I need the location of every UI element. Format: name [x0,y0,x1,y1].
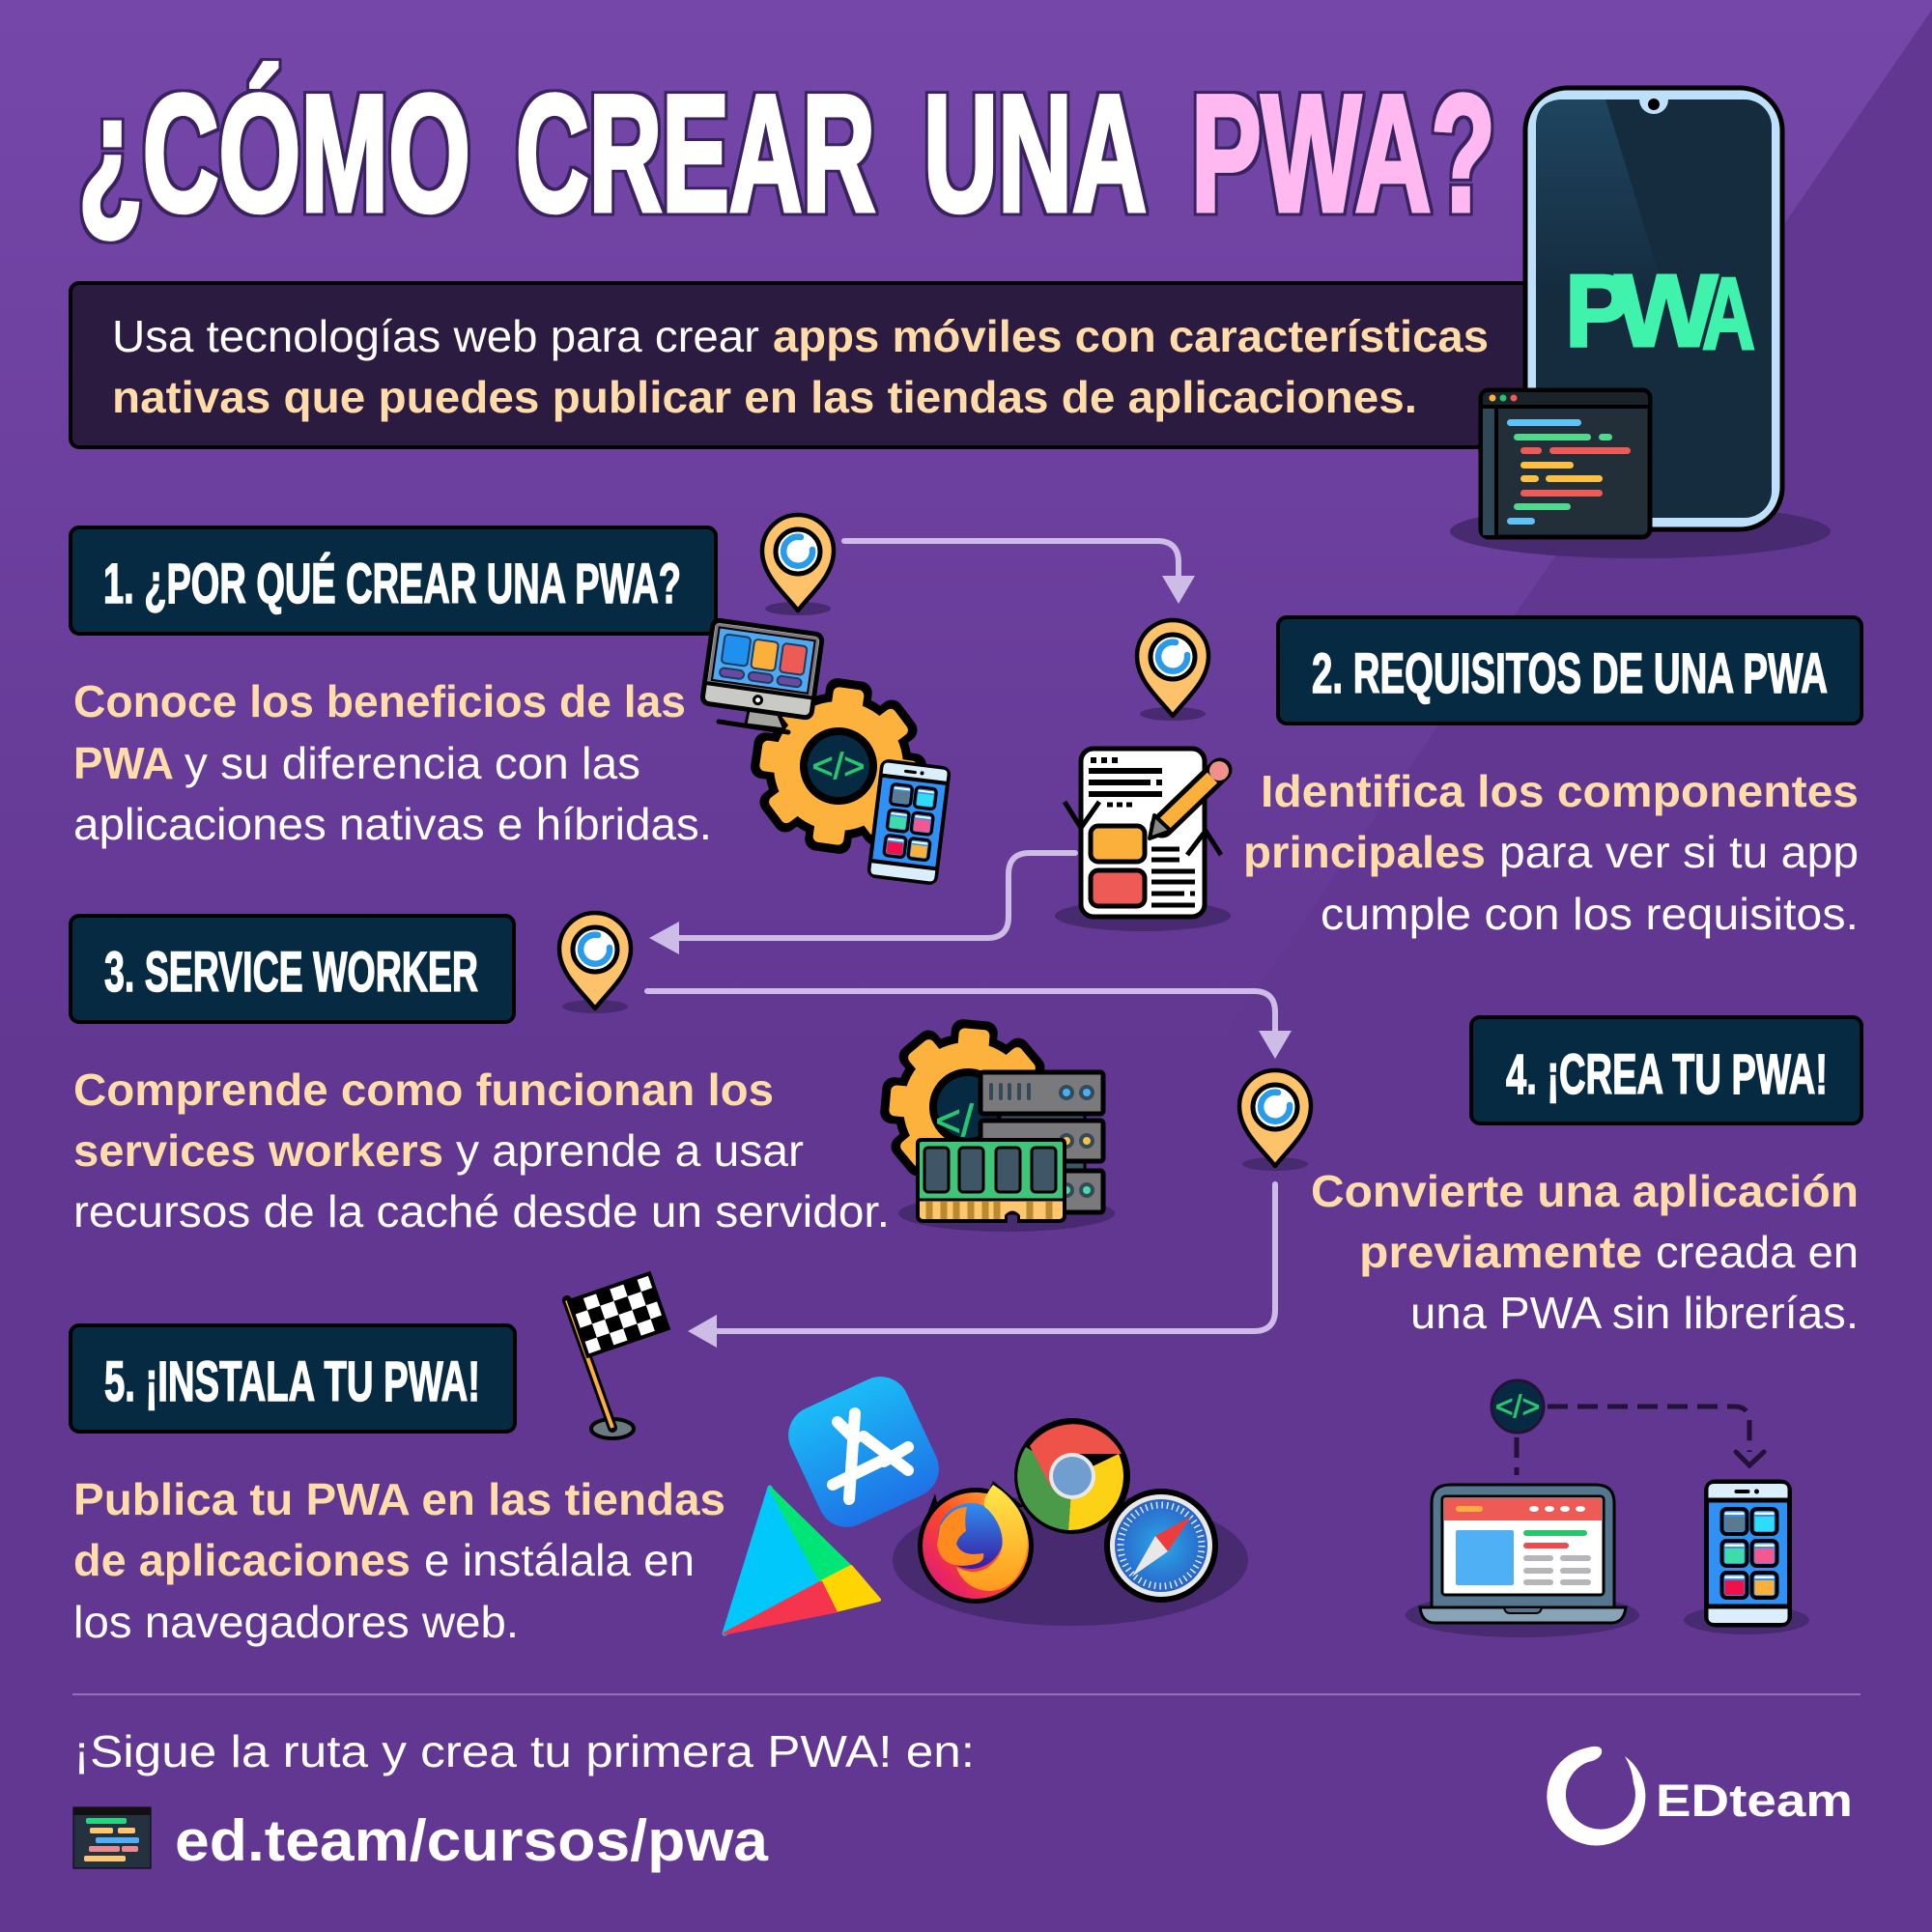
icon: safari [1104,1489,1218,1603]
icon: pin 2 [1137,620,1208,721]
text block: step 5: de aplicaciones [73,1535,411,1585]
logo: EDteam [1547,1747,1853,1845]
icon: checklist document with pencil [1055,749,1231,931]
heading: step 2 [1278,617,1861,724]
text block: step 4: Convierte una aplicación [1311,1166,1859,1216]
icon: gear, servers and memory [873,1012,1115,1232]
text block: step 4: una PWA sin librerías. [1410,1288,1859,1338]
panel: intro [71,283,1539,447]
icon: code to devices diagram: </> [1495,1389,1540,1424]
heading: step 3 [71,916,514,1022]
divider [72,1693,1861,1695]
icon: pin 4 [1239,1070,1311,1171]
icon: pin 3 [559,913,631,1013]
text block: step 3: Comprende como funcionan los [73,1065,774,1115]
arrow: step 4 to step 5 [688,1184,1275,1348]
text block: step 5: los navegadores web. [73,1597,519,1647]
text block: step 2: cumple con los requisitos. [1321,889,1859,939]
icon: firefox [918,1481,1034,1604]
text block: footer url: ed.team/cursos/pwa [175,1808,769,1873]
icon: phone shadow [1450,504,1831,558]
icon: google play [724,1488,879,1634]
icon: code window [1481,390,1650,537]
icon: gear with monitor and phone: </> [812,747,865,787]
icon: checkered flag [567,1273,668,1438]
icon: gear, servers and memory: </ [935,1095,974,1146]
text block: step 2: para ver si tu app [1499,827,1859,877]
icon: app store [779,1367,949,1537]
text block: step 1: y su diferencia con las [185,738,640,788]
heading: step 1 [71,527,716,634]
icon: laptop [1406,1485,1639,1637]
icon: phone with PWA logo: P [1565,254,1631,368]
text block: step 1: aplicaciones nativas e híbridas. [73,799,712,849]
arrow: step 2 to step 3 [649,853,1075,954]
text block: step 1: PWA [73,738,174,788]
title: CREAR [516,61,875,246]
icon: footer code window [73,1807,151,1868]
text block: step 1: Conoce los beneficios de las [73,676,686,726]
title: PWA? [1191,61,1495,246]
text block: step 3: y aprende a usar [456,1125,804,1176]
text block: step 2: principales [1243,827,1486,877]
text block: step 4: previamente [1359,1227,1642,1277]
title: ¿CÓMO [78,61,470,246]
heading: step 1: 1. ¿POR QUÉ CREAR UNA PWA? [103,553,681,615]
icon: browser shadow [893,1494,1248,1626]
icon: code to devices diagram [1492,1380,1764,1475]
heading: step 5 [71,1325,515,1432]
title [78,61,1495,246]
heading: step 4 [1471,1017,1861,1123]
text block: step 2 [1243,766,1859,939]
text block: step 4 [1311,1166,1859,1338]
icon: phone with PWA logo [1525,88,1782,529]
text block: step 2: Identifica los componentes [1261,766,1859,816]
logo: EDteam: EDteam [1656,1775,1853,1826]
text block: step 5: e instálala en [424,1535,695,1585]
icon: phone with PWA logo: A [1702,257,1755,371]
heading: step 5: 5. ¡INSTALA TU PWA! [104,1350,480,1413]
text block: step 5 [73,1474,725,1647]
panel: intro: apps móviles con características [773,311,1489,361]
text block: step 5: Publica tu PWA en las tiendas [73,1474,725,1524]
icon: pin 1 [762,515,834,615]
text block: step 3: services workers [73,1125,443,1176]
text block: step 3 [73,1065,890,1236]
text block: step 4: creada en [1656,1227,1859,1277]
icon: phone with PWA logo: W [1615,254,1718,368]
icon: gear with monitor and phone [702,619,950,884]
icon: chrome [1014,1418,1130,1534]
heading: step 3: 3. SERVICE WORKER [104,941,478,1004]
text block: footer call: ¡Sigue la ruta y crea tu primera PWA! en: [73,1726,975,1776]
text block: step 1 [73,676,712,849]
arrow: step 1 to step 2 [844,541,1195,604]
icon: smartphone [1684,1482,1809,1634]
title: UNA [923,61,1147,246]
panel: intro: nativas que puedes publicar en las tiendas de aplicaciones. [112,372,1417,422]
panel: intro: Usa tecnologías web para crear [112,311,759,361]
text block: step 3: recursos de la caché desde un servidor. [73,1186,890,1236]
arrow: step 3 to step 4 [647,991,1292,1059]
